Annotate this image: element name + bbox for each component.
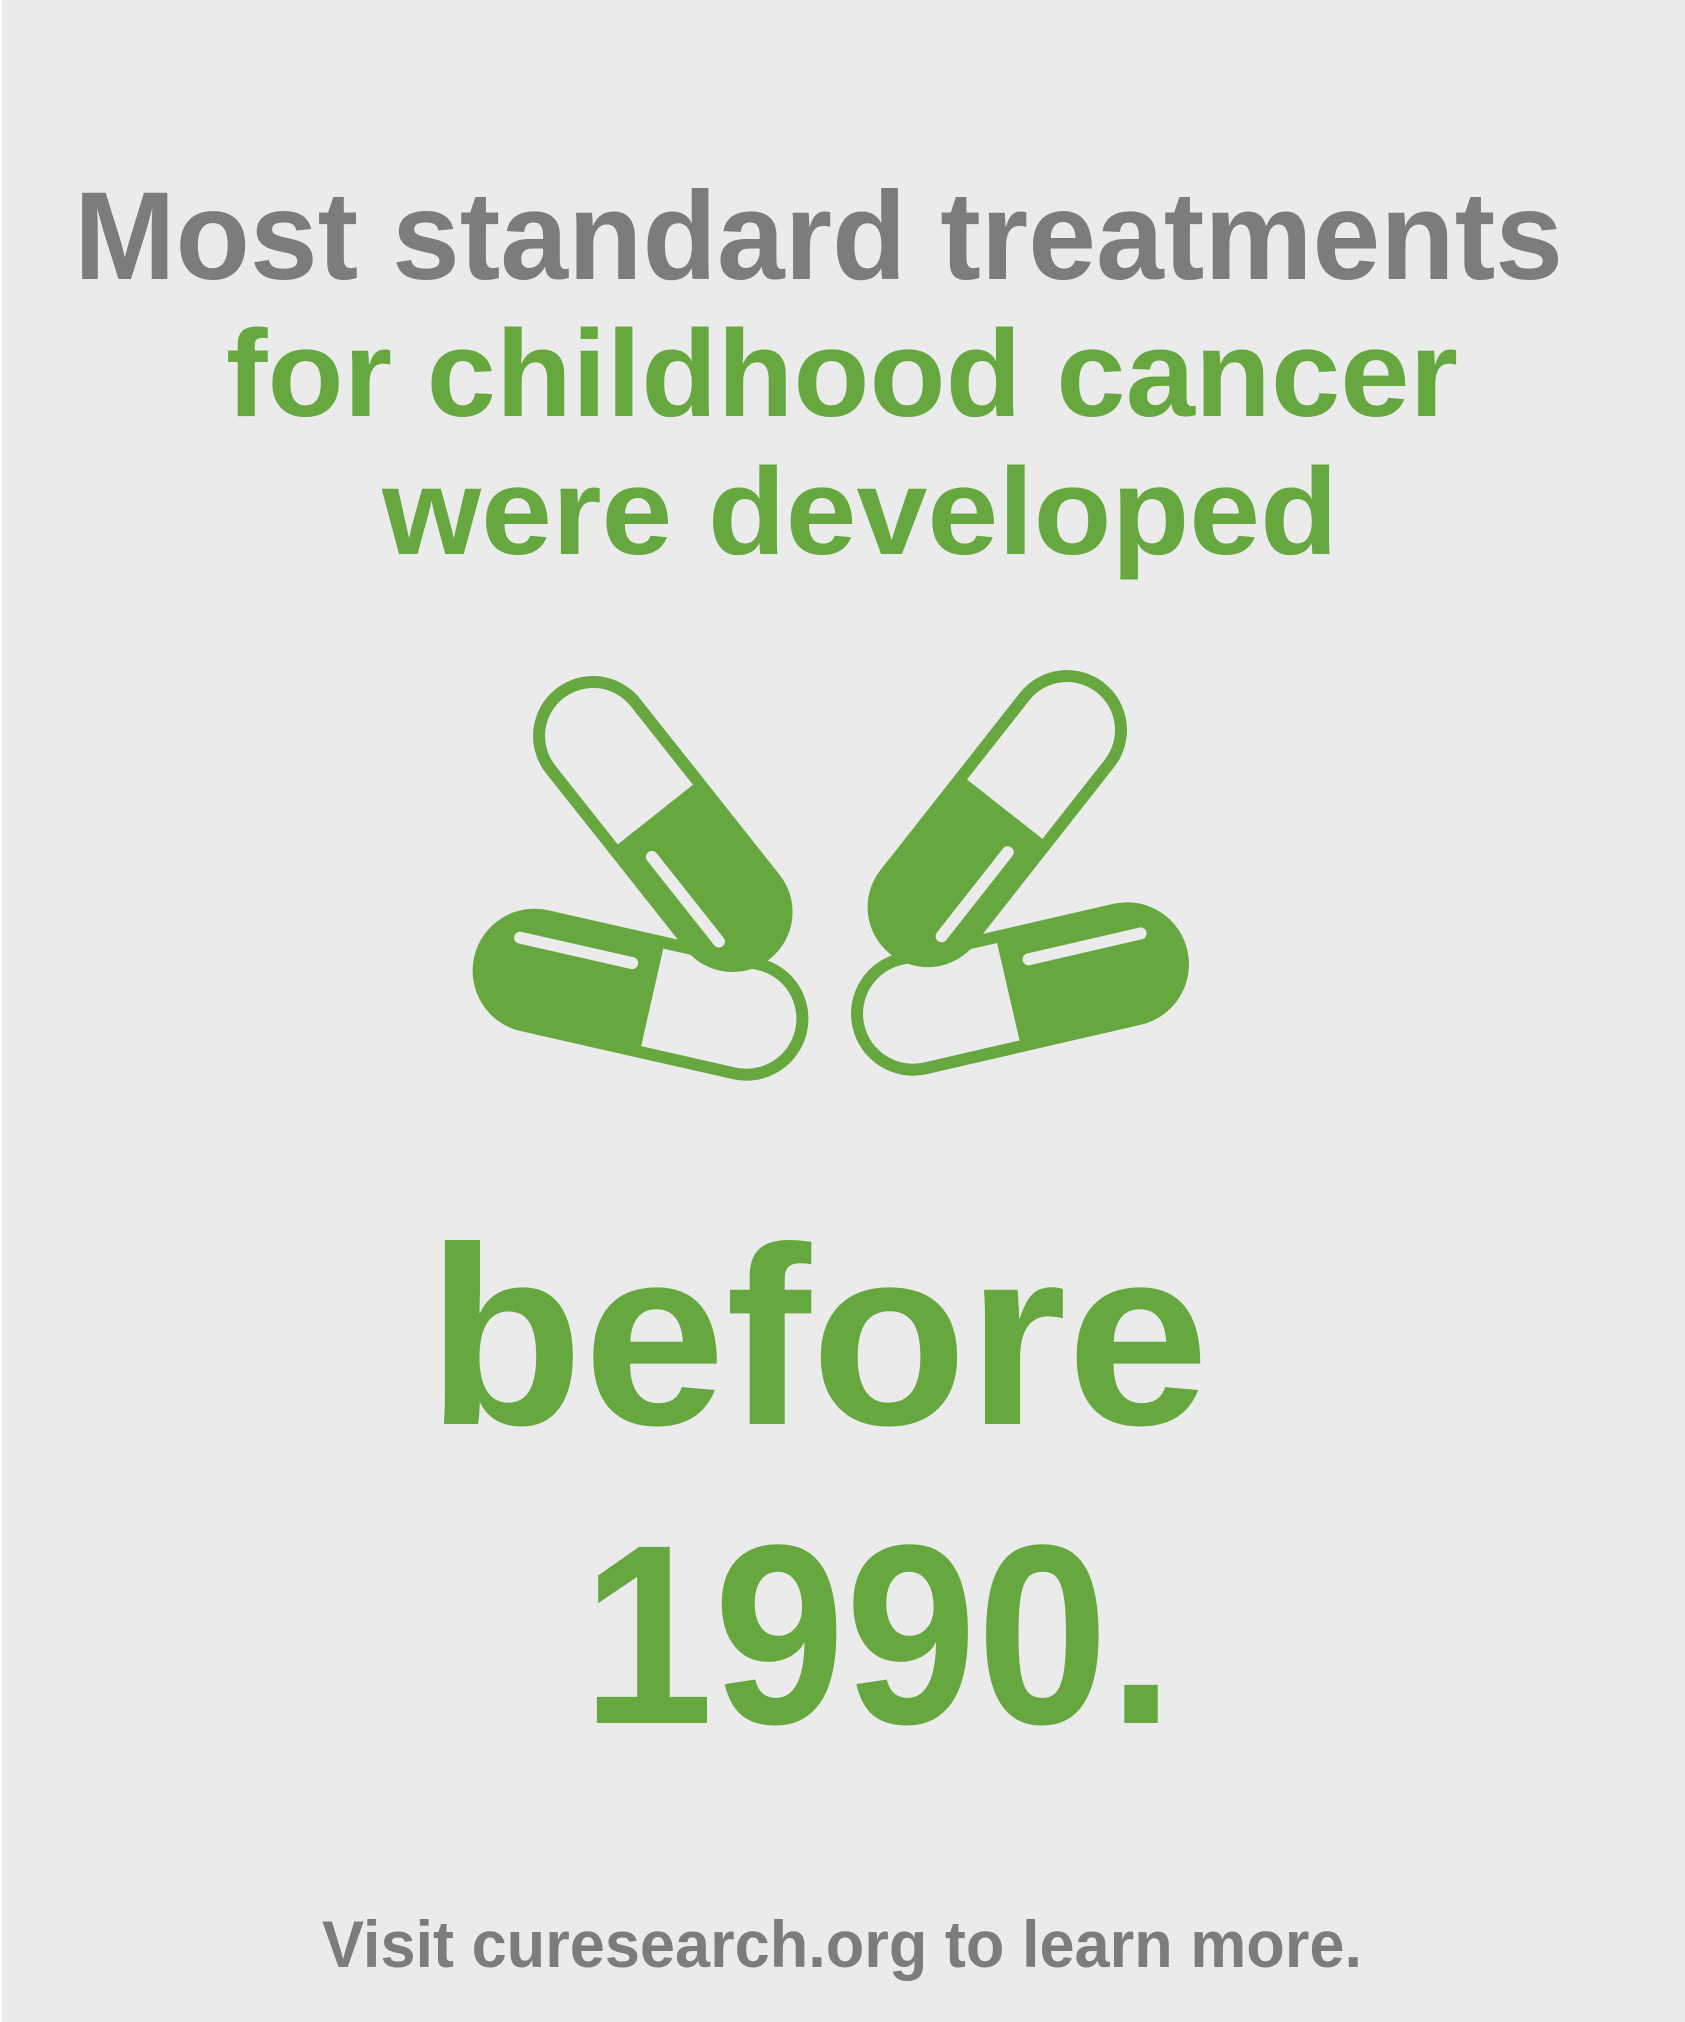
icon: lower left capsule xyxy=(460,897,821,1093)
icon: upper left capsule xyxy=(509,652,817,996)
headline: before: before xyxy=(427,1194,1209,1478)
title line 1: Most standard treatments xyxy=(74,167,1563,306)
headline: 1990: 1990. xyxy=(582,1492,1174,1778)
footer text: Visit curesearch.org to learn more. xyxy=(322,1907,1362,1981)
icon: upper right capsule xyxy=(843,646,1151,991)
icon: lower right capsule xyxy=(839,890,1201,1088)
title line 2: for childhood cancer xyxy=(226,306,1458,443)
title xyxy=(74,167,1563,581)
title line 3: were developed xyxy=(381,444,1338,581)
icon: capsules xyxy=(460,646,1201,1093)
